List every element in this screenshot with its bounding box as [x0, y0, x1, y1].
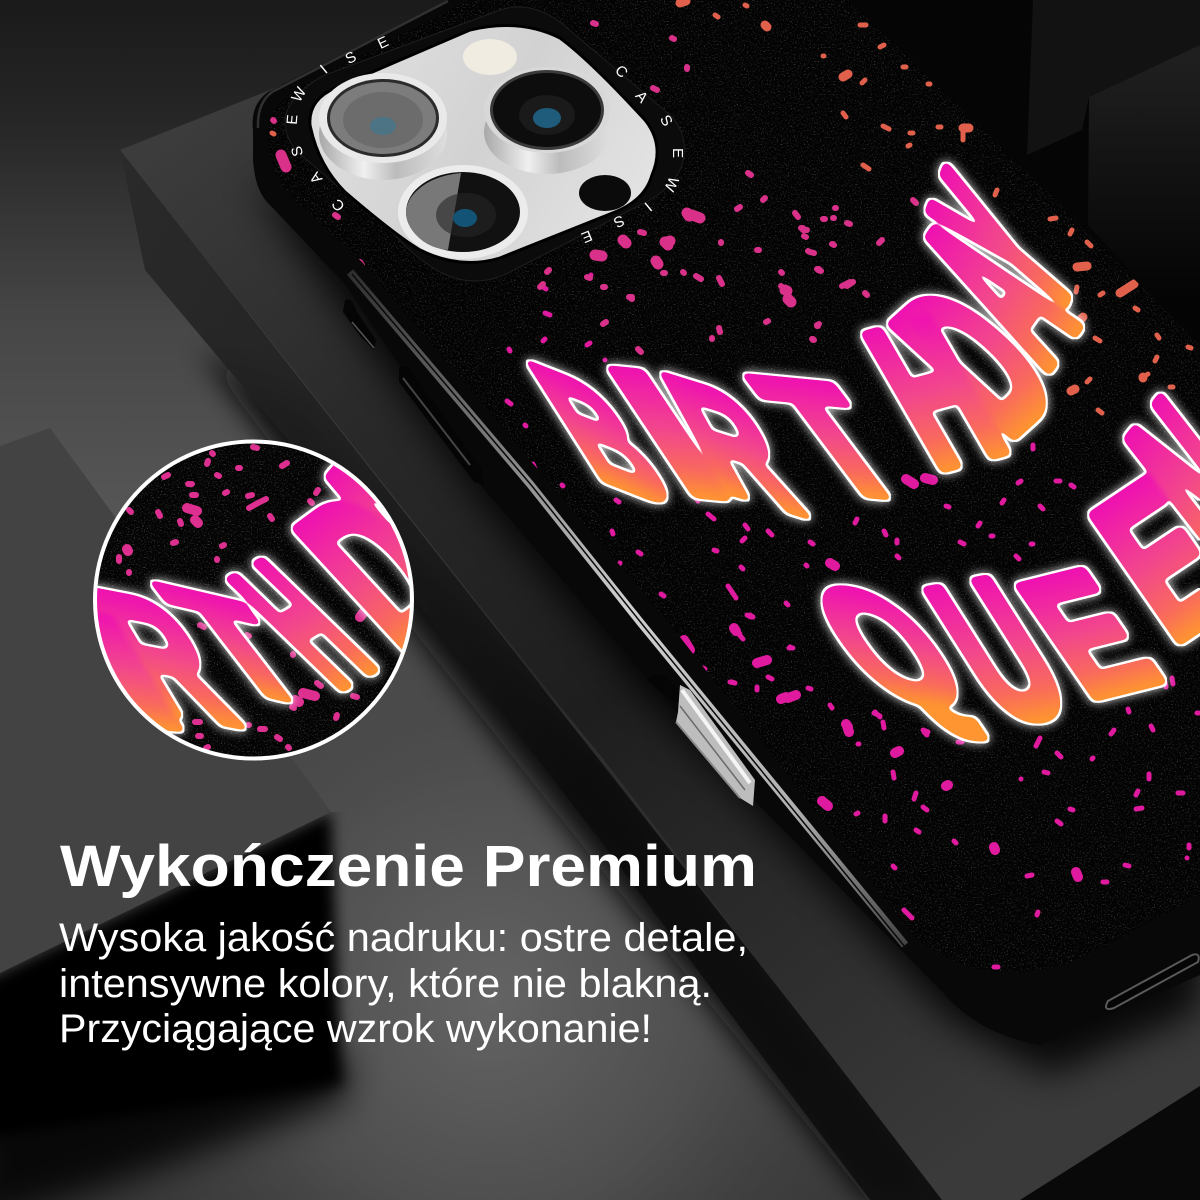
circle lettering fragment: R [57, 552, 267, 764]
bumper branding: CASEWISE: S [288, 144, 307, 158]
circle speckles [116, 447, 357, 748]
bumper branding: CASEWISE: C [328, 195, 349, 215]
heading: Wykończenie Premium [60, 834, 757, 899]
phone print lettering: BIRTHDAY QUEEN: B [499, 326, 704, 546]
circle lettering fragment: H [191, 525, 413, 723]
body text: Przyciągające wzrok wykonanie! [59, 1007, 652, 1051]
phone edge: silver highlight [350, 272, 905, 947]
phone printed back surface [250, 0, 1200, 1000]
bumper branding: CASEWISE: E [579, 226, 595, 246]
speckle pattern: print confetti on phone [272, 1, 1199, 967]
phone bottom: charging port [1106, 954, 1199, 1009]
lens: bottom with reflection [398, 165, 528, 259]
background: lower-left block [0, 428, 345, 1200]
bumper branding: CASEWISE: C [611, 62, 631, 82]
bumper branding: CASEWISE: W [660, 174, 682, 195]
phone print lettering: BIRTHDAY QUEEN: H [834, 275, 1038, 511]
phone side: long button recess [399, 366, 484, 484]
body text: intensywne kolory, które nie blakną. [59, 962, 712, 1006]
bumper branding: CASEWISE [284, 33, 686, 246]
circle lettering fragment: T [128, 552, 348, 740]
bumper branding: CASEWISE: S [611, 211, 627, 231]
phone print lettering: BIRTHDAY QUEEN: A [875, 174, 1121, 407]
phone print lettering: BIRTHDAY QUEEN [499, 132, 1200, 764]
circle lettering fragment: D [256, 447, 503, 692]
phone side: upper button recess [343, 299, 376, 350]
phone print lettering: BIRTHDAY QUEEN: I [574, 331, 763, 537]
phone side: silver button [647, 674, 755, 806]
phone print lettering: BIRTHDAY QUEEN: T [719, 341, 946, 534]
body text [59, 916, 748, 1051]
bumper branding: CASEWISE: S [342, 48, 359, 68]
bumper branding: CASEWISE: I [641, 199, 655, 214]
lens: left [319, 73, 447, 180]
phone print lettering: BIRTHDAY QUEEN: E [988, 536, 1190, 734]
bumper branding: CASEWISE: I [317, 62, 331, 77]
lens: right [484, 67, 610, 174]
magnified detail circle [93, 440, 414, 760]
bumper branding: CASEWISE: S [656, 112, 676, 129]
phone print lettering: BIRTHDAY QUEEN: Q [778, 551, 1003, 744]
body text: Wysoka jakość nadruku: ostre detale, [59, 916, 748, 960]
bumper branding: CASEWISE: E [375, 33, 391, 53]
circle lettering fragment: A [276, 415, 505, 618]
bumper branding: CASEWISE: A [306, 169, 326, 187]
phone case: glossy black body [253, 0, 1200, 1045]
phone print lettering: BIRTHDAY QUEEN: D [849, 244, 1101, 475]
microphone hole [579, 175, 631, 211]
phone case: soft shadow [250, 180, 1200, 1075]
camera flash [463, 39, 517, 75]
camera island: black bumper [284, 7, 686, 281]
bumper branding: CASEWISE: E [669, 148, 686, 158]
camera island: glass window [310, 26, 657, 262]
circle lettering fragment: I [46, 580, 213, 764]
phone print lettering: BIRTHDAY QUEEN: R [635, 336, 829, 552]
phone print lettering: BIRTHDAY QUEEN: Y [890, 132, 1115, 358]
bumper branding: CASEWISE: E [284, 114, 301, 125]
bumper branding: CASEWISE: A [632, 88, 651, 106]
phone print lettering: BIRTHDAY QUEEN: U [895, 538, 1104, 764]
bumper branding: CASEWISE: W [288, 84, 310, 105]
circle lettering fragment [97, 460, 410, 740]
